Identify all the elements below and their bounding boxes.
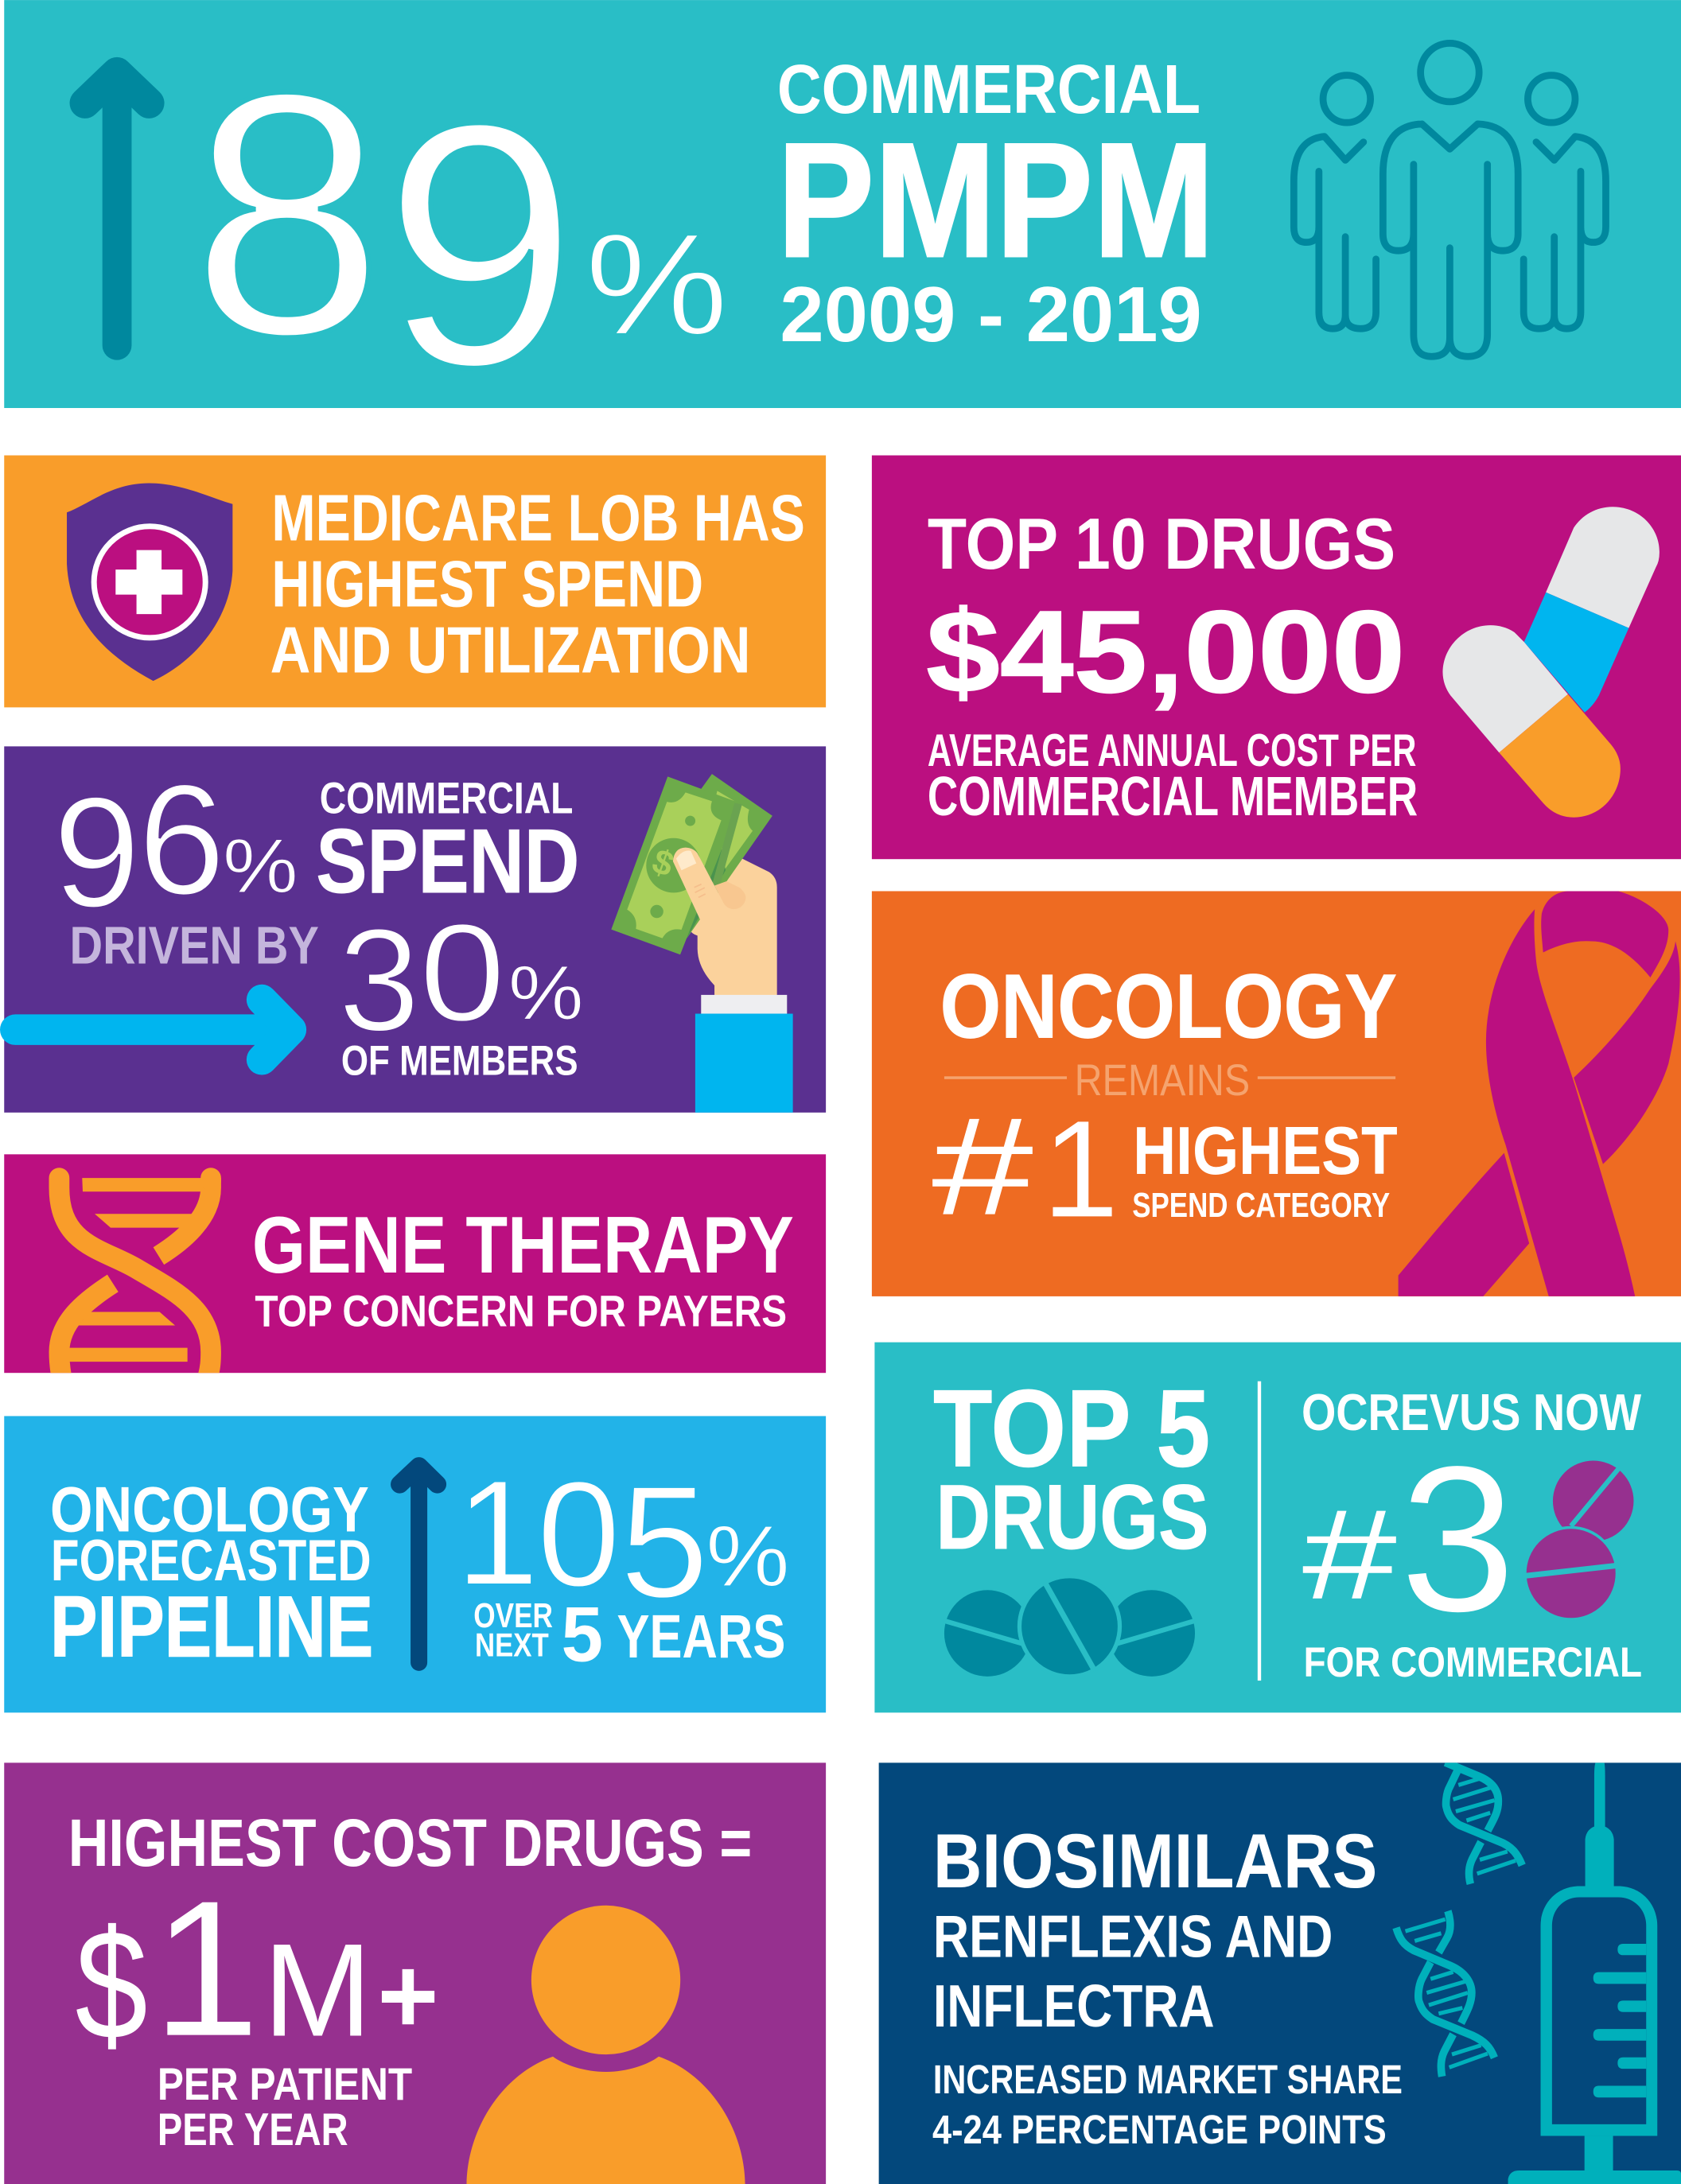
- stat: 96%: 6: [138, 752, 225, 927]
- text: remains: REMAINS: [1075, 1055, 1250, 1105]
- stat: 96%: [53, 752, 298, 940]
- stat: 105%: 5: [620, 1452, 709, 1631]
- stat: $1M+: [76, 1859, 438, 2077]
- text: oncology forecasted pipeline: ONCOLOGY: [50, 1475, 369, 1546]
- text: per patient per year: [158, 2059, 412, 2155]
- heading: commercial PMPM 2009-2019: PMPM: [777, 110, 1215, 291]
- text: over next 5 years: NEXT: [475, 1626, 549, 1664]
- text: highest spend category: [1132, 1113, 1398, 1225]
- icon: up arrow: [399, 1466, 438, 1662]
- text: driven by: DRIVEN BY: [70, 917, 319, 976]
- stat: 30% of members: 3: [338, 899, 420, 1062]
- stat: 105%: 1: [455, 1449, 539, 1617]
- text: over next 5 years: OVER: [473, 1596, 553, 1635]
- text: top 5 drugs: DRUGS: [936, 1466, 1209, 1568]
- text: highest spend category: HIGHEST: [1133, 1113, 1398, 1189]
- stat: 89%: 8: [191, 21, 383, 408]
- text: Medicare LOB has highest spend and utilization: AND UTILIZATION: [270, 615, 751, 687]
- text: gene therapy top concern: [252, 1199, 794, 1336]
- stat: $1M+: +: [377, 1934, 438, 2056]
- text: commercial spend: SPEND: [316, 811, 579, 912]
- stat: 89%: %: [585, 203, 729, 365]
- text: per patient per year: PER YEAR: [158, 2104, 348, 2155]
- stat: 105%: 0: [537, 1451, 621, 1619]
- text: highest cost drugs: HIGHEST COST DRUGS =: [68, 1805, 752, 1880]
- stat: #1: [932, 1090, 1119, 1247]
- text: top 5 drugs: [933, 1367, 1210, 1568]
- icon: shield with cross: [67, 484, 232, 681]
- stat: $1M+: 1: [152, 1859, 260, 2077]
- text: biosimilars: RENFLEXIS AND: [933, 1903, 1333, 1970]
- panel: 96% commercial spend: [4, 746, 826, 1113]
- text: remains: [944, 1055, 1395, 1105]
- icon: right arrow: [15, 1000, 291, 1059]
- icon: hand holding money: [611, 774, 793, 1113]
- icon: person: [466, 1906, 745, 2184]
- stat: 105%: [455, 1449, 790, 1631]
- text: over next 5 years: [473, 1591, 785, 1678]
- text: oncology forecasted pipeline: PIPELINE: [50, 1578, 373, 1674]
- text: biosimilars: [932, 1819, 1403, 2152]
- panel: 89% commercial PMPM: [4, 0, 1681, 439]
- panel: oncology forecasted pipeline: [4, 1416, 826, 1712]
- stat: 30% of members: 0: [419, 896, 505, 1051]
- text: biosimilars: INFLECTRA: [933, 1972, 1215, 2039]
- text: top 10 drugs cost: TOP 10 DRUGS: [928, 504, 1395, 585]
- text: top 10 drugs cost: COMMERCIAL MEMBER: [928, 765, 1418, 827]
- stat: $1M+: $: [76, 1898, 148, 2072]
- panel: top 10 drugs: [872, 456, 1681, 859]
- text: commercial spend: COMMERCIAL: [320, 772, 573, 822]
- stat: #1: 1: [1041, 1092, 1119, 1247]
- divider: [1258, 1382, 1261, 1681]
- text: Medicare LOB has highest spend and utilization: MEDICARE LOB HAS: [271, 482, 805, 554]
- text: top 5 drugs: TOP 5: [933, 1367, 1210, 1490]
- text: for commercial: FOR COMMERCIAL: [1304, 1639, 1642, 1686]
- text: per patient per year: PER PATIENT: [158, 2059, 412, 2110]
- text: oncology: ONCOLOGY: [940, 956, 1397, 1057]
- icon: hand holding money: $: [648, 841, 679, 884]
- panel: gene therapy: [4, 1154, 826, 1376]
- text: oncology forecasted pipeline: [50, 1475, 373, 1674]
- icon: lower DNA strand: [1396, 1911, 1494, 2077]
- icon: upper DNA strand: [1446, 1762, 1522, 1884]
- panel: top 5 drugs / Ocrevus: [874, 1343, 1681, 1712]
- text: top 10 drugs cost: $45,000: [926, 587, 1405, 717]
- stat: #3: #: [1302, 1483, 1397, 1626]
- heading: commercial PMPM 2009-2019: COMMERCIAL: [777, 50, 1200, 128]
- text: oncology forecasted pipeline: FORECASTED: [51, 1527, 372, 1593]
- stat: #1: #: [932, 1090, 1033, 1245]
- panel: highest cost drugs: [4, 1762, 826, 2184]
- icon: up arrow: [85, 72, 149, 345]
- heading: commercial PMPM 2009-2019: [777, 50, 1215, 358]
- text: biosimilars: 4-24 PERCENTAGE POINTS: [932, 2107, 1387, 2152]
- stat: 105%: %: [706, 1508, 790, 1604]
- panel: oncology remains #1: [872, 891, 1681, 1296]
- text: over next 5 years: 5: [562, 1591, 603, 1678]
- stat: #3: [1302, 1422, 1516, 1656]
- text: highest spend category: SPEND CATEGORY: [1132, 1186, 1390, 1225]
- icon: three teal pills: [944, 1576, 1195, 1677]
- stat: $1M+: M: [263, 1916, 372, 2064]
- text: biosimilars: BIOSIMILARS: [933, 1819, 1377, 1904]
- stat: 96%: 9: [53, 764, 141, 940]
- icon: syringe: [1508, 1762, 1681, 2184]
- text: commercial spend: [316, 772, 579, 912]
- icon: capsules: [1442, 507, 1660, 818]
- heading: commercial PMPM 2009-2019: 2009 - 2019: [780, 270, 1202, 358]
- stat: 30% of members: OF MEMBERS: [341, 1038, 578, 1085]
- text: gene therapy top concern: TOP CONCERN FOR PAYERS: [255, 1286, 787, 1336]
- panel: biosimilars: [879, 1762, 1681, 2184]
- text: over next 5 years: YEARS: [617, 1603, 785, 1671]
- icon: two purple pills: [1522, 1460, 1633, 1619]
- icon: awareness ribbon: [1399, 891, 1680, 1296]
- text: Medicare LOB has highest spend and utilization: HIGHEST SPEND: [271, 548, 703, 620]
- stat: 30% of members: %: [508, 951, 584, 1036]
- icon: DNA helix: [59, 1178, 211, 1376]
- stat: 96%: %: [223, 824, 298, 909]
- stat: 89%: [191, 21, 729, 439]
- stat: 30% of members: [338, 896, 584, 1085]
- text: Medicare LOB has highest spend and utilization: [270, 482, 805, 687]
- panel: Medicare LOB: [4, 456, 826, 707]
- text: biosimilars: INCREASED MARKET SHARE: [933, 2057, 1403, 2102]
- icon: three people: [1294, 43, 1605, 356]
- text: gene therapy top concern: GENE THERAPY: [252, 1199, 794, 1290]
- stat: #3: 3: [1399, 1422, 1516, 1656]
- text: top 10 drugs cost: AVERAGE ANNUAL COST PER: [928, 725, 1416, 776]
- stat: 89%: 9: [383, 52, 578, 439]
- text: top 10 drugs cost: [926, 504, 1418, 827]
